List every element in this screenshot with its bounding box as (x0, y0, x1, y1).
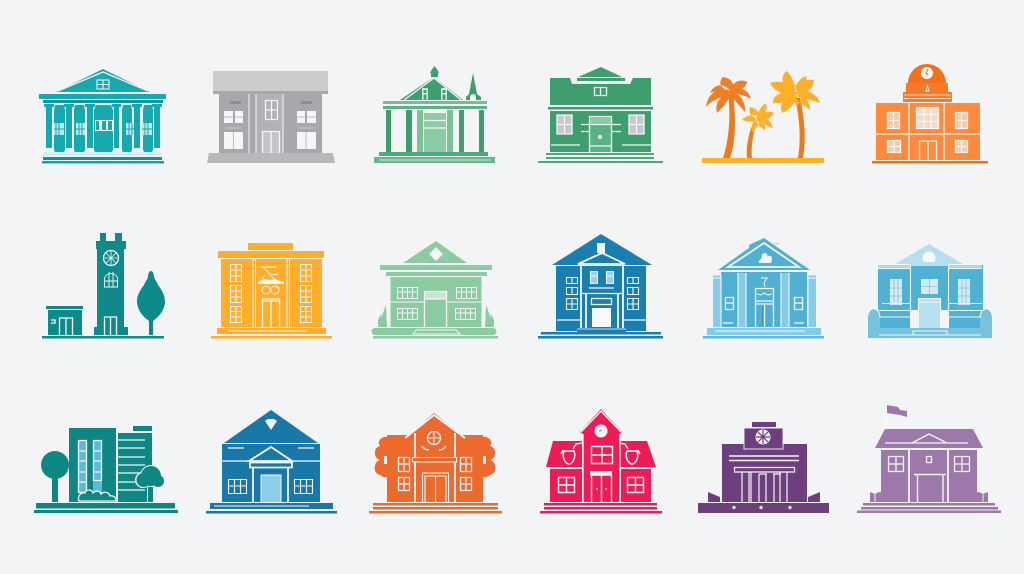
icon: grey flat-roof building (207, 71, 335, 163)
icon: clock tower with tree (42, 233, 165, 338)
icon: light blue temple (703, 238, 824, 338)
icon: green house with pediment (538, 67, 663, 163)
icon: orange gabled hall with trees (369, 413, 502, 514)
icon: orange domed building (872, 64, 988, 164)
icon: teal columned bank (39, 69, 166, 164)
icon: light green wide house (372, 241, 498, 338)
icon: light purple house with flag (857, 405, 1001, 513)
icon: pale blue house with circle gable (868, 244, 992, 338)
icon: blue gabled school (538, 234, 663, 338)
icon: dark purple civic building (698, 422, 829, 513)
icon: palm trees (702, 71, 824, 163)
icon: teal office towers with trees (34, 426, 178, 513)
icon: blue house with porch (206, 410, 337, 514)
icon: yellow building (211, 243, 332, 338)
icon: crimson school with clock (540, 409, 662, 514)
icon: green columned hall with spire (374, 66, 495, 163)
